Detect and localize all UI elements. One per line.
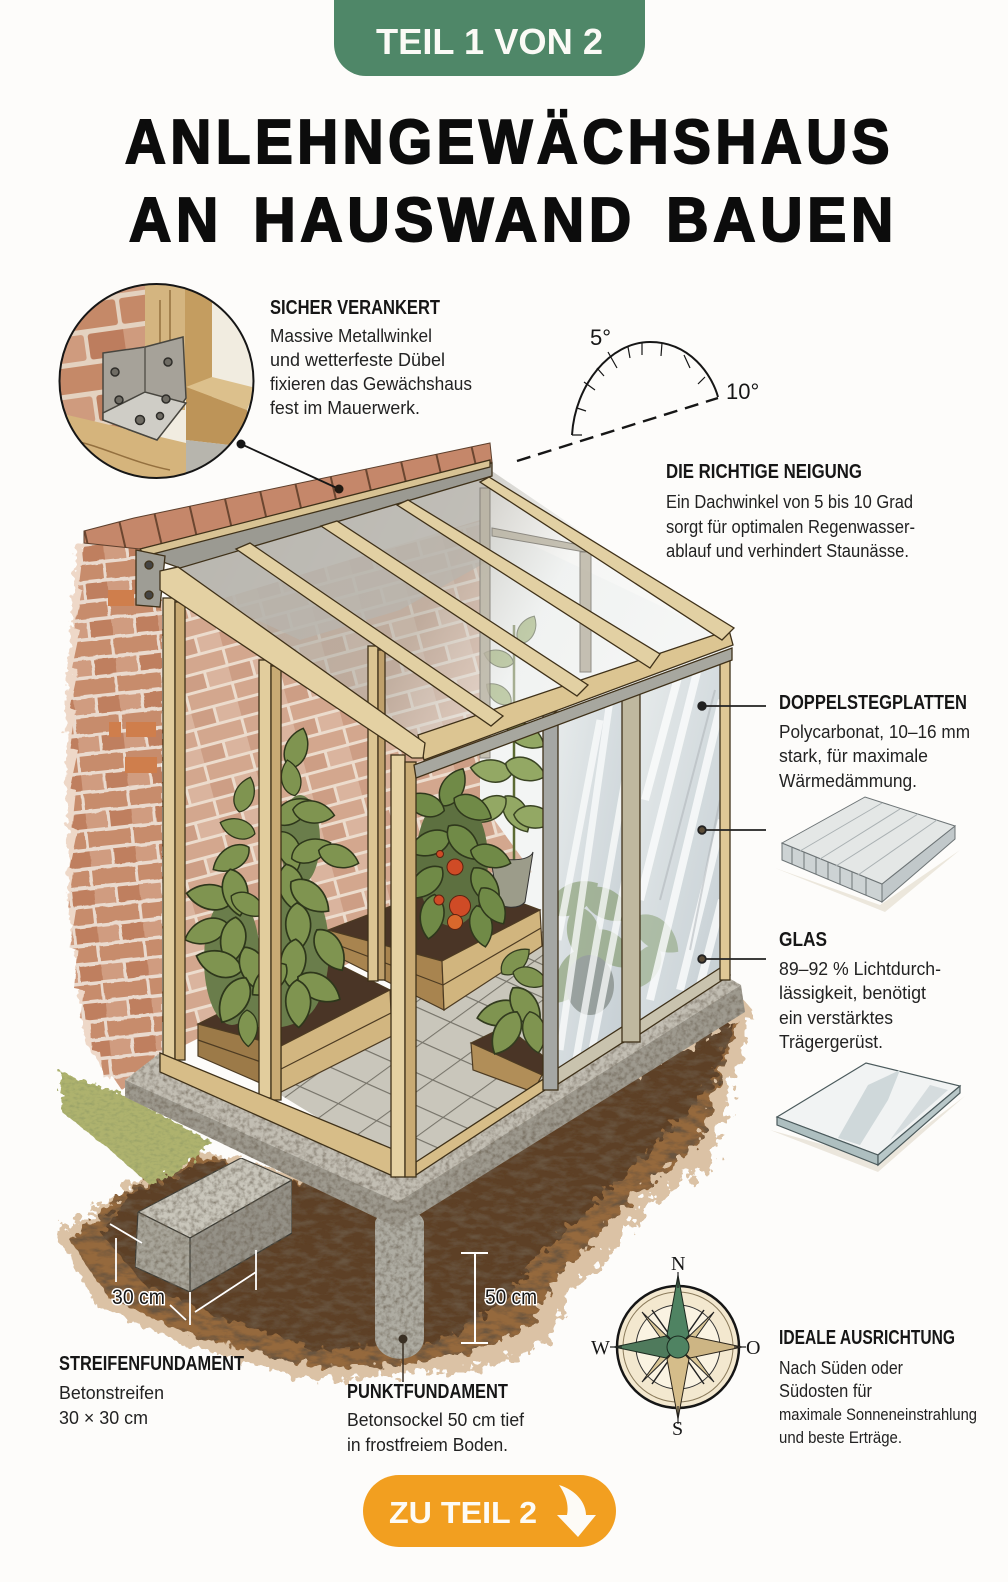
text: roof pitch: [666, 461, 915, 561]
soil cross-section: [58, 990, 752, 1380]
text: orientation: IDEALE AUSRICHTUNG: [779, 1327, 955, 1349]
dimension: 50 cm: 50 cm: [485, 1286, 537, 1309]
back post middle: [368, 646, 385, 981]
plant: small bed: [475, 942, 551, 1060]
title: ANLEHNGEWÄCHSHAUS: [125, 108, 894, 177]
text: strip foundation: STREIFENFUNDAMENT: [59, 1353, 244, 1375]
text: roof pitch: Ein Dachwinkel von 5 bis 10 Grad: [666, 492, 913, 512]
concrete slab: [125, 973, 745, 1228]
timber frame: [136, 460, 734, 1177]
leader: anchor to wall: [236, 440, 344, 494]
roof pitch protractor: 10°: [726, 379, 759, 404]
text: anchoring: [270, 297, 472, 418]
rafter 2: [236, 543, 503, 726]
text: orientation: und beste Erträge.: [779, 1428, 902, 1447]
text: twin-wall sheets: stark, für maximale: [779, 746, 928, 766]
rafter 5: [480, 477, 734, 640]
plant: left tomato vine: [181, 725, 362, 1046]
greenhouse interior background: [185, 520, 732, 1175]
inset: wall anchor detail: [55, 280, 256, 485]
lower sill right: [416, 1078, 545, 1175]
brick house wall: [66, 443, 492, 1090]
roof glazing: [160, 469, 732, 755]
button: to part 2: ZU TEIL 2: [389, 1495, 537, 1530]
grass: [60, 1072, 212, 1185]
text: roof pitch: DIE RICHTIGE NEIGUNG: [666, 461, 862, 483]
front header beam: [418, 630, 733, 760]
metal door frame: [543, 690, 640, 1090]
back corner post and strut: [480, 488, 591, 758]
text: glass: GLAS: [779, 929, 827, 951]
pale wash: [66, 545, 130, 1080]
plant: potted seedling: [465, 612, 557, 907]
tomatoes: [434, 850, 470, 930]
text: anchoring: Massive Metallwinkel: [270, 326, 432, 346]
ledger on wall: [140, 460, 492, 568]
text: twin-wall sheets: Polycarbonat, 10–16 mm: [779, 722, 970, 742]
icon: glass pane: [770, 1063, 965, 1172]
text: orientation: Südosten für: [779, 1381, 872, 1401]
button: to part 2: [363, 1475, 616, 1547]
text: anchoring: fest im Mauerwerk.: [270, 398, 420, 418]
far right post: [720, 655, 730, 980]
raised bed: small: [471, 1026, 548, 1092]
text: glass: lässigkeit, benötigt: [779, 983, 926, 1003]
text: glass: 89–92 % Lichtdurch-: [779, 959, 941, 979]
raised bed: back: [328, 880, 542, 1010]
corner post: [391, 755, 416, 1177]
compass letters: [591, 1253, 760, 1440]
text: glass: Trägergerüst.: [779, 1032, 883, 1052]
icon: twin-wall sheet: [775, 797, 960, 912]
compass rose: [591, 1253, 760, 1440]
text: point foundation: in frostfreiem Boden.: [347, 1435, 508, 1455]
rafter 3: [321, 521, 588, 696]
text: orientation: maximale Sonneneinstrahlung: [779, 1405, 977, 1424]
post second: [259, 660, 281, 1100]
back foliage: [204, 795, 329, 1028]
strip foundation: [135, 1158, 292, 1292]
text: strip foundation: [59, 1353, 244, 1428]
title: AN HAUSWAND BAUEN: [129, 186, 898, 255]
text: orientation: [779, 1327, 977, 1447]
text: roof pitch: ablauf und verhindert Staunässe.: [666, 541, 909, 561]
orange accent bricks: [108, 590, 157, 773]
text: point foundation: Betonsockel 50 cm tief: [347, 1410, 525, 1430]
text: anchoring: fixieren das Gewächshaus: [270, 374, 472, 394]
text: twin-wall sheets: DOPPELSTEGPLATTEN: [779, 692, 967, 714]
roof pitch protractor: [517, 325, 759, 461]
text: orientation: Nach Süden oder: [779, 1358, 903, 1378]
door pane: [558, 702, 622, 1067]
compass letters: O: [746, 1337, 760, 1359]
point foundation: [375, 1209, 424, 1382]
lower sill left: [160, 1053, 395, 1177]
text: twin-wall sheets: [779, 692, 970, 791]
wall face: [68, 540, 162, 1090]
compass letters: W: [591, 1337, 610, 1359]
text: anchoring: SICHER VERANKERT: [270, 297, 440, 319]
text: point foundation: [347, 1381, 525, 1455]
text: glass: ein verstärktes: [779, 1008, 893, 1028]
icon: curved arrow: [557, 1485, 596, 1537]
roof pitch protractor: 5°: [590, 325, 611, 350]
text: twin-wall sheets: Wärmedämmung.: [779, 771, 917, 791]
text: roof pitch: sorgt für optimalen Regenwasser-: [666, 517, 915, 537]
banner: part 1 of 2: TEIL 1 VON 2: [376, 21, 603, 62]
text: strip foundation: 30 × 30 cm: [59, 1408, 148, 1428]
compass letters: S: [672, 1418, 683, 1440]
dimension: 30 cm: 30 cm: [112, 1286, 165, 1309]
compass letters: N: [671, 1253, 685, 1275]
dimension: 50 cm: [461, 1253, 537, 1343]
banner: part 1 of 2: [334, 0, 645, 76]
wall bracket: [136, 550, 165, 607]
metal header: [414, 648, 732, 778]
plant: tomato with fruit: [401, 764, 514, 949]
raised bed: left: [198, 959, 392, 1092]
text: anchoring: und wetterfeste Dübel: [270, 350, 445, 370]
back post left: [163, 598, 185, 1060]
wall cap: [84, 443, 492, 549]
leaders to glazing callouts: [698, 702, 766, 963]
glazed side walls: [558, 666, 720, 1067]
fixed pane: [640, 666, 720, 1019]
text: glass: [779, 929, 941, 1052]
pane sill: [558, 968, 730, 1084]
title: [125, 108, 898, 255]
rafter 1 front: [160, 567, 425, 758]
dimension: 30 cm: [110, 1224, 256, 1325]
text: point foundation: PUNKTFUNDAMENT: [347, 1381, 508, 1403]
rafter 4: [397, 500, 660, 668]
flower pot: [490, 852, 533, 907]
text: strip foundation: Betonstreifen: [59, 1383, 164, 1403]
